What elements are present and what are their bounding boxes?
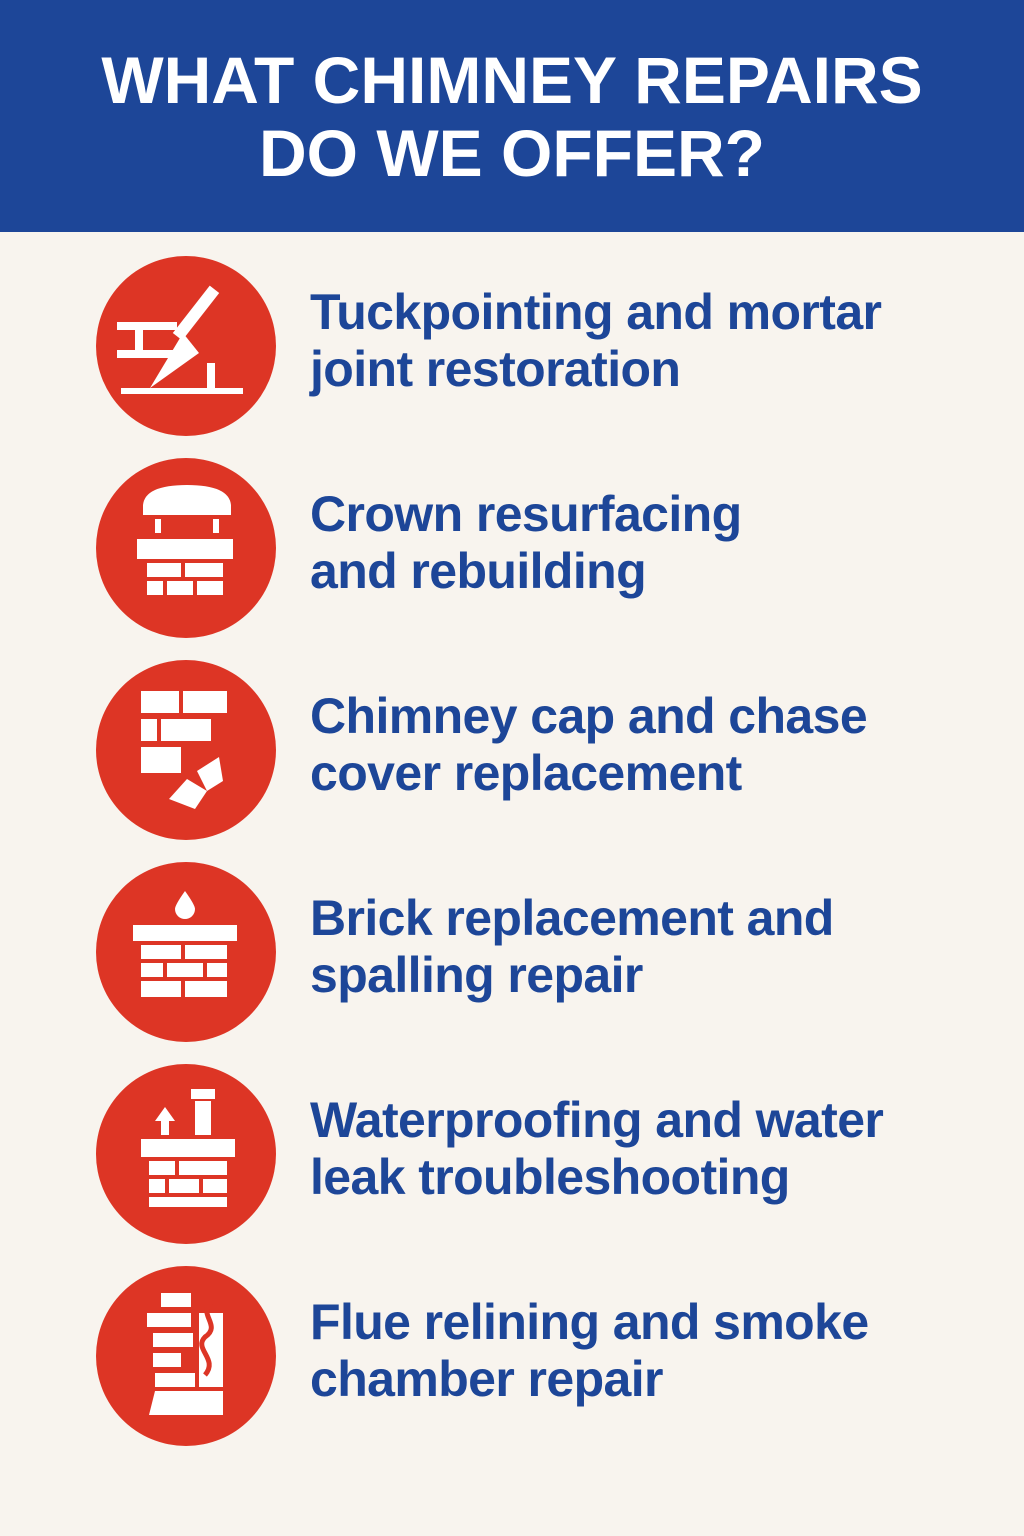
text: and rebuilding [310,543,646,599]
text [310,1092,884,1205]
text [310,688,867,801]
icon: flue with smoke [96,1266,276,1446]
item: cap [96,660,867,840]
item: flue [96,1266,869,1446]
text: leak troubleshooting [310,1149,790,1205]
text: spalling repair [310,947,643,1003]
item: brick [96,862,834,1042]
header [0,0,1024,232]
text: Tuckpointing and mortar [310,284,881,340]
text: joint restoration [310,341,680,397]
icon: brick with drop [96,862,276,1042]
item: tuckpointing [96,256,882,436]
text: Waterproofing and water [310,1092,883,1148]
icon: bricks with trowel [96,660,276,840]
text [310,1294,869,1407]
text: cover replacement [310,745,742,801]
icon: trowel and bricks [96,256,276,436]
item: waterproofing [96,1064,884,1244]
title: DO WE OFFER? [259,116,765,190]
title [101,43,923,190]
text: Crown resurfacing [310,486,742,542]
text [310,890,834,1003]
text: Brick replacement and [310,890,834,946]
item: crown [96,458,742,638]
icon: chimney crown [96,458,276,638]
text: chamber repair [310,1351,663,1407]
text: Chimney cap and chase [310,688,867,744]
text [310,486,742,599]
icon: chimney with arrow [96,1064,276,1244]
title: WHAT CHIMNEY REPAIRS [101,43,923,117]
text: Flue relining and smoke [310,1294,869,1350]
text [309,284,882,397]
